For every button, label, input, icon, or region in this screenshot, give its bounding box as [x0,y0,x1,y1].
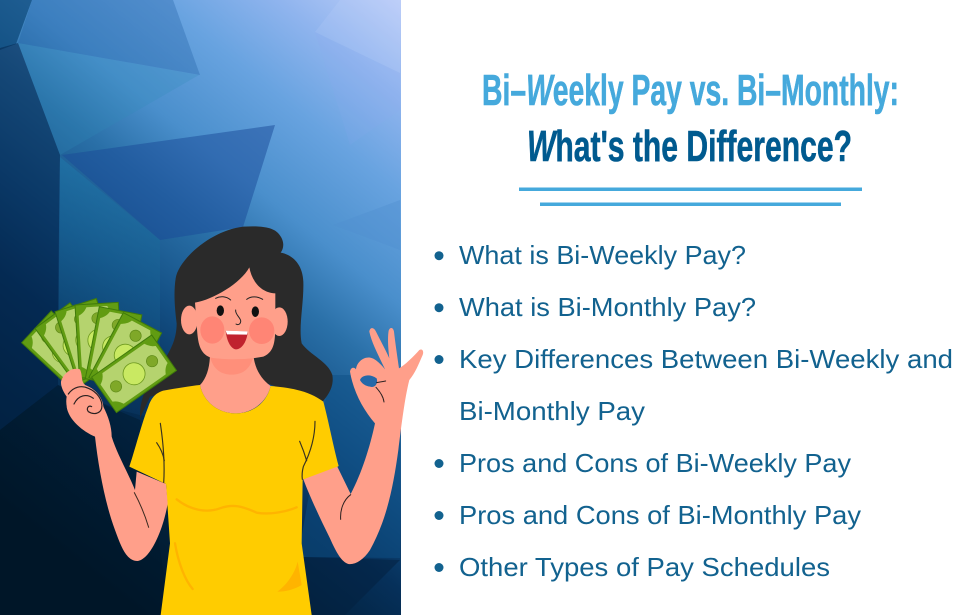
left hand [61,369,104,426]
item: key differences [434,344,953,426]
left arm [67,407,168,561]
sleeve lines [157,421,315,483]
mouth [226,331,248,349]
right hand and arm lines [341,381,386,519]
illustration: woman holding money [22,226,423,615]
item: bi-monthly: What is Bi-Monthly Pay? [459,292,756,322]
hair [140,226,333,418]
title divider lines [519,188,862,206]
title [482,66,899,171]
item: other schedules: Other Types of Pay Schedules [459,552,830,582]
right arm and hand [303,328,423,564]
cheek: left [200,316,224,344]
shirt shadow [277,562,302,592]
ear: right [271,307,288,336]
item: pros cons weekly: Pros and Cons of Bi-Weekly Pay [459,448,851,478]
left hand finger lines [68,387,102,414]
title line 2: What's the Difference? [527,122,852,171]
shirt folds [175,499,297,589]
left arm line [134,493,149,527]
neck shadow [210,357,253,375]
neck [200,353,271,413]
banknote fan [22,299,177,413]
face [195,267,275,359]
item: key differences: Bi-Monthly Pay [459,396,645,426]
teeth [226,331,248,335]
hand gap [360,375,377,387]
item: key differences: Key Differences Between Bi-Weekly and [459,344,953,374]
shirt [129,385,339,615]
eye: right [252,306,259,317]
item: pros cons monthly: Pros and Cons of Bi-Monthly Pay [459,500,861,530]
item: bi-weekly: What is Bi-Weekly Pay? [459,240,746,270]
eyebrows and nose [216,297,263,325]
bullet list [434,240,953,582]
ear: left [181,306,198,334]
eye: left [217,305,224,316]
cheek: right [249,317,274,344]
panel: polygon background [0,0,401,615]
